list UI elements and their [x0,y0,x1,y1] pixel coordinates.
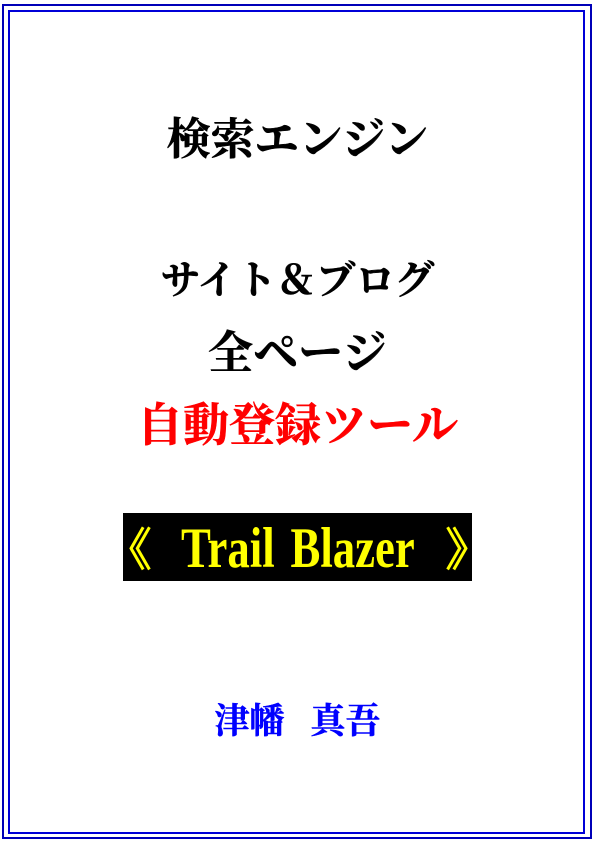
heading: site and blog: サイト＆ブログ [161,259,434,303]
heading: automatic registration tool: 自動登録ツール [137,400,458,451]
product name: Trail Blazer [181,517,415,580]
banner: Trail Blazer [123,513,472,581]
heading: all pages: 全ページ [208,328,387,378]
author name: 津幡 真吾 [214,702,381,741]
heading: search engine: 検索エンジン [167,115,428,164]
